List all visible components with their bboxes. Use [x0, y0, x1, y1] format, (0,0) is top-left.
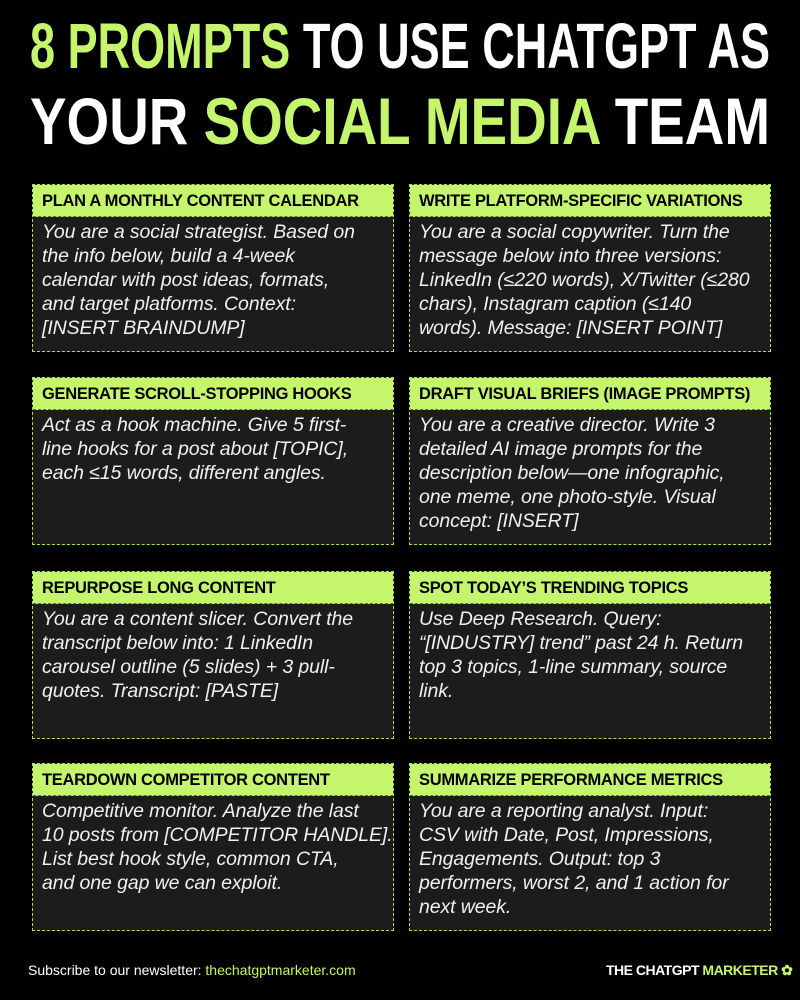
- card: repurpose: quotes. Transcript: [PASTE]: [42, 680, 278, 702]
- card: competitor: List best hook style, common CTA,: [42, 848, 339, 870]
- card: content calendar: You are a social strategist. Based on: [42, 221, 355, 243]
- card: visual briefs: You are a creative director. Write 3: [419, 414, 715, 436]
- card: content calendar: the info below, build a 4-week: [42, 245, 295, 267]
- footer: newsletter: Subscribe to our newsletter: thechatgptmarketer.com: [28, 962, 356, 978]
- card: content calendar: PLAN A MONTHLY CONTENT CALENDAR: [42, 192, 359, 210]
- card: metrics: You are a reporting analyst. Input:: [419, 800, 708, 822]
- card: visual briefs: concept: [INSERT]: [419, 510, 578, 532]
- card: competitor: Competitive monitor. Analyze the last: [42, 800, 359, 822]
- card: platform variations: WRITE PLATFORM-SPECIFIC VARIATIONS: [419, 192, 742, 210]
- card: platform variations: chars), Instagram caption (≤140: [419, 293, 691, 315]
- card: competitor: 10 posts from [COMPETITOR HANDLE].: [42, 824, 393, 846]
- card: content calendar: [INSERT BRAINDUMP]: [42, 317, 245, 339]
- card: platform variations: LinkedIn (≤220 words), X/Twitter (≤280: [419, 269, 749, 291]
- card: platform variations: words). Message: [INSERT POINT]: [419, 317, 722, 339]
- card: competitor: TEARDOWN COMPETITOR CONTENT: [42, 771, 330, 789]
- card: trending: Use Deep Research. Query:: [419, 608, 661, 630]
- card: repurpose: carousel outline (5 slides) + 3 pull-: [42, 656, 335, 678]
- card: competitor: and one gap we can exploit.: [42, 872, 282, 894]
- card: repurpose: REPURPOSE LONG CONTENT: [42, 579, 276, 597]
- card: repurpose: [32, 571, 394, 739]
- card: trending: link.: [419, 680, 453, 702]
- card: platform variations: message below into three versions:: [419, 245, 721, 267]
- card: hooks: line hooks for a post about [TOPIC],: [42, 438, 348, 460]
- card: visual briefs: description below—one infographic,: [419, 462, 725, 484]
- card: metrics: performers, worst 2, and 1 action for: [419, 872, 729, 894]
- card: visual briefs: one meme, one photo-style. Visual: [419, 486, 716, 508]
- card: platform variations: You are a social copywriter. Turn the: [419, 221, 730, 243]
- card: hooks: each ≤15 words, different angles.: [42, 462, 326, 484]
- card: trending: SPOT TODAY’S TRENDING TOPICS: [419, 579, 688, 597]
- card: visual briefs: detailed AI image prompts for the: [419, 438, 702, 460]
- card: platform variations: [409, 184, 771, 352]
- card: metrics: CSV with Date, Post, Impressions,: [419, 824, 714, 846]
- card: hooks: [32, 377, 394, 545]
- title: [30, 10, 770, 158]
- card: content calendar: calendar with post ideas, formats,: [42, 269, 329, 291]
- card: visual briefs: DRAFT VISUAL BRIEFS (IMAGE PROMPTS): [419, 385, 750, 403]
- card: competitor: [32, 763, 394, 931]
- footer: brand: THE CHATGPT MARKETER ✿: [606, 962, 792, 978]
- card: metrics: next week.: [419, 896, 511, 918]
- card: trending: [409, 571, 771, 739]
- card: metrics: SUMMARIZE PERFORMANCE METRICS: [419, 771, 723, 789]
- card: content calendar: [32, 184, 394, 352]
- card: visual briefs: [409, 377, 771, 545]
- card: repurpose: You are a content slicer. Convert the: [42, 608, 353, 630]
- card: metrics: [409, 763, 771, 931]
- card: repurpose: transcript below into: 1 LinkedIn: [42, 632, 313, 654]
- card: trending: top 3 topics, 1-line summary, source: [419, 656, 727, 678]
- card: content calendar: and target platforms. Context:: [42, 293, 296, 315]
- card: trending: “[INDUSTRY] trend” past 24 h. Return: [419, 632, 743, 654]
- card: metrics: Engagements. Output: top 3: [419, 848, 660, 870]
- card: hooks: Act as a hook machine. Give 5 first-: [42, 414, 346, 436]
- card: hooks: GENERATE SCROLL-STOPPING HOOKS: [42, 385, 351, 403]
- title: YOUR SOCIAL MEDIA TEAM: [30, 84, 770, 158]
